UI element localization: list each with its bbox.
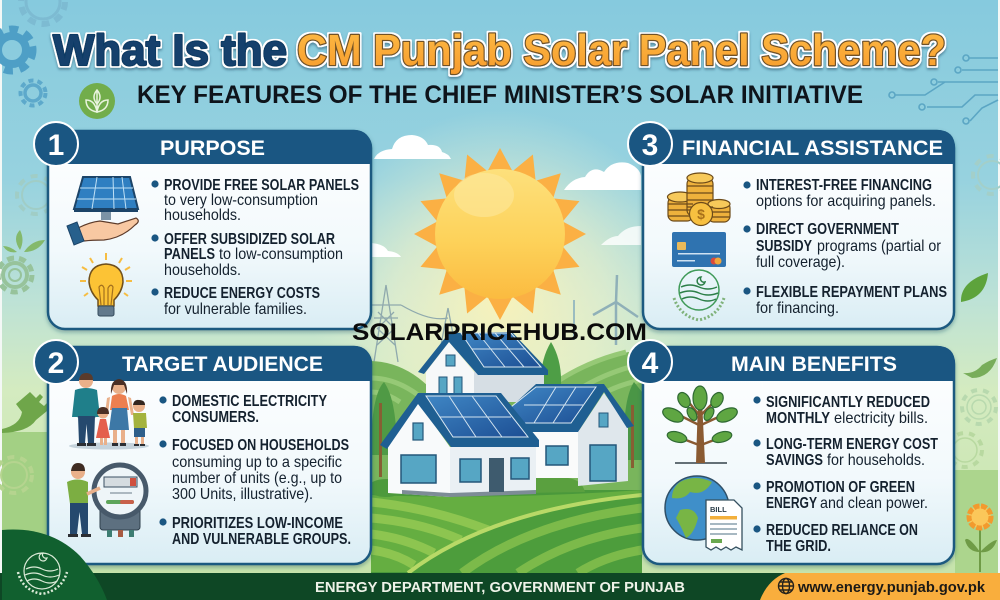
footer bar: [0, 530, 1000, 600]
bullet list: PRIORITIZES LOW-INCOME: [172, 515, 343, 532]
bullet list: 300 Units, illustrative).: [172, 486, 313, 503]
bullet list: FLEXIBLE REPAYMENT PLANS: [756, 284, 947, 301]
panel: financial assistance: [628, 122, 955, 329]
bullet list: THE GRID.: [766, 538, 831, 555]
number badge 1: 1: [48, 129, 64, 162]
pylons and wind turbines: [371, 275, 638, 362]
website badge: www.energy.punjab.gov.pk: [797, 579, 986, 596]
icon: Punjab emblem: [674, 270, 724, 320]
green hills and fields: [368, 342, 642, 573]
title: What Is the: [53, 26, 287, 75]
clouds: [371, 135, 641, 257]
bullet list: SAVINGS: [766, 452, 823, 469]
bullet list: DIRECT GOVERNMENT: [756, 221, 899, 238]
bullet list: PROVIDE FREE SOLAR PANELS: [164, 177, 359, 194]
bullet list: [159, 393, 351, 548]
bullet list: FOCUSED ON HOUSEHOLDS: [172, 437, 349, 454]
panel: purpose: [34, 122, 371, 329]
bullet list: REDUCED RELIANCE ON: [766, 522, 918, 539]
bushes: [368, 479, 404, 497]
watermark: SOLARPRICEHUB.COM: [352, 319, 647, 346]
bullet list: households.: [164, 262, 241, 279]
icon: flower: [965, 506, 997, 572]
icon: globe and bill: BILL: [710, 505, 727, 514]
subtitle: KEY FEATURES OF THE CHIEF MINISTER’S SOLAR INITIATIVE: [137, 81, 863, 109]
bullet list: MONTHLY: [766, 410, 830, 427]
title: [53, 26, 946, 75]
icon: tree: [660, 386, 740, 463]
boy: [133, 400, 145, 412]
house illustration: [380, 332, 634, 497]
bullet list: LONG-TERM ENERGY COST: [766, 436, 938, 453]
right field stripes: [408, 495, 642, 573]
number badge 4: [628, 340, 672, 384]
icon: bank card: [672, 232, 726, 267]
bullet list: PROMOTION OF GREEN: [766, 479, 915, 496]
number badge 4: 4: [642, 347, 659, 380]
bullet list: options for acquiring panels.: [756, 193, 936, 210]
bullet list: for vulnerable families.: [164, 301, 307, 318]
heading: MAIN BENEFITS: [731, 353, 897, 376]
bullet list: to very low-consumption: [164, 192, 318, 209]
bullet list: OFFER SUBSIDIZED SOLAR: [164, 231, 335, 248]
icon: coins: $: [697, 206, 705, 222]
icon: man with electric meter: [67, 463, 146, 537]
bullet list: SUBSIDY: [756, 238, 812, 255]
bullet list: DOMESTIC ELECTRICITY: [172, 393, 327, 410]
bullet list: REDUCE ENERGY COSTS: [164, 285, 320, 302]
bullet list: [753, 394, 938, 555]
bullet list: to low-consumption: [219, 246, 343, 263]
bullet list: number of units (e.g., up to: [172, 470, 342, 487]
bullet list: and clean power.: [820, 495, 928, 512]
number badge 3: 3: [642, 129, 658, 162]
number badge 1: [34, 122, 78, 166]
left field stripes: [371, 502, 488, 565]
title: CM Punjab Solar Panel Scheme?: [297, 26, 946, 75]
bullet list: electricity bills.: [834, 410, 928, 427]
bullet list: CONSUMERS.: [172, 409, 259, 426]
icon: light bulb: [80, 253, 132, 316]
side plant and plug icons: [2, 230, 997, 572]
bullet list: consuming up to a specific: [172, 454, 342, 471]
man: [79, 374, 93, 388]
icon: family: [69, 373, 149, 450]
upper house: [418, 332, 548, 402]
panel: target audience: [34, 340, 371, 564]
number badge 2: [34, 340, 78, 384]
heading: TARGET AUDIENCE: [122, 353, 323, 376]
icon: globe: [778, 578, 794, 594]
woman: [112, 380, 126, 394]
heading: PURPOSE: [160, 137, 265, 160]
bullet list: [151, 177, 359, 318]
bullet list: AND VULNERABLE GROUPS.: [172, 531, 351, 548]
bullet list: full coverage).: [756, 254, 845, 271]
icon: solar panel on hand: [67, 177, 138, 245]
icon: plug: [2, 392, 47, 433]
panel: main benefits: [628, 340, 955, 564]
girl: [98, 408, 108, 418]
sun: [414, 148, 586, 320]
website badge: [760, 573, 1000, 600]
right house: [511, 384, 634, 486]
field base: [371, 490, 642, 573]
bullet list: programs (partial or: [817, 238, 942, 255]
bullet list: for financing.: [756, 300, 839, 317]
green corner with emblem: [2, 530, 107, 600]
front house: [380, 393, 539, 497]
icon: leaf badge: [79, 83, 115, 119]
bullet list: INTEREST-FREE FINANCING: [756, 177, 932, 194]
number badge 3: [628, 122, 672, 166]
bullet list: for households.: [827, 452, 925, 469]
bullet list: households.: [164, 207, 241, 224]
bullet list: SIGNIFICANTLY REDUCED: [766, 394, 930, 411]
bullet list: ENERGY: [766, 495, 817, 512]
trees: [371, 382, 397, 455]
icon: coins: [668, 173, 730, 226]
bullet list: PANELS: [164, 246, 215, 263]
heading: FINANCIAL ASSISTANCE: [682, 137, 943, 160]
number badge 2: 2: [48, 347, 64, 380]
bullet list: [743, 177, 947, 317]
icon: globe and bill: [665, 476, 742, 550]
footer text: ENERGY DEPARTMENT, GOVERNMENT OF PUNJAB: [315, 579, 685, 596]
